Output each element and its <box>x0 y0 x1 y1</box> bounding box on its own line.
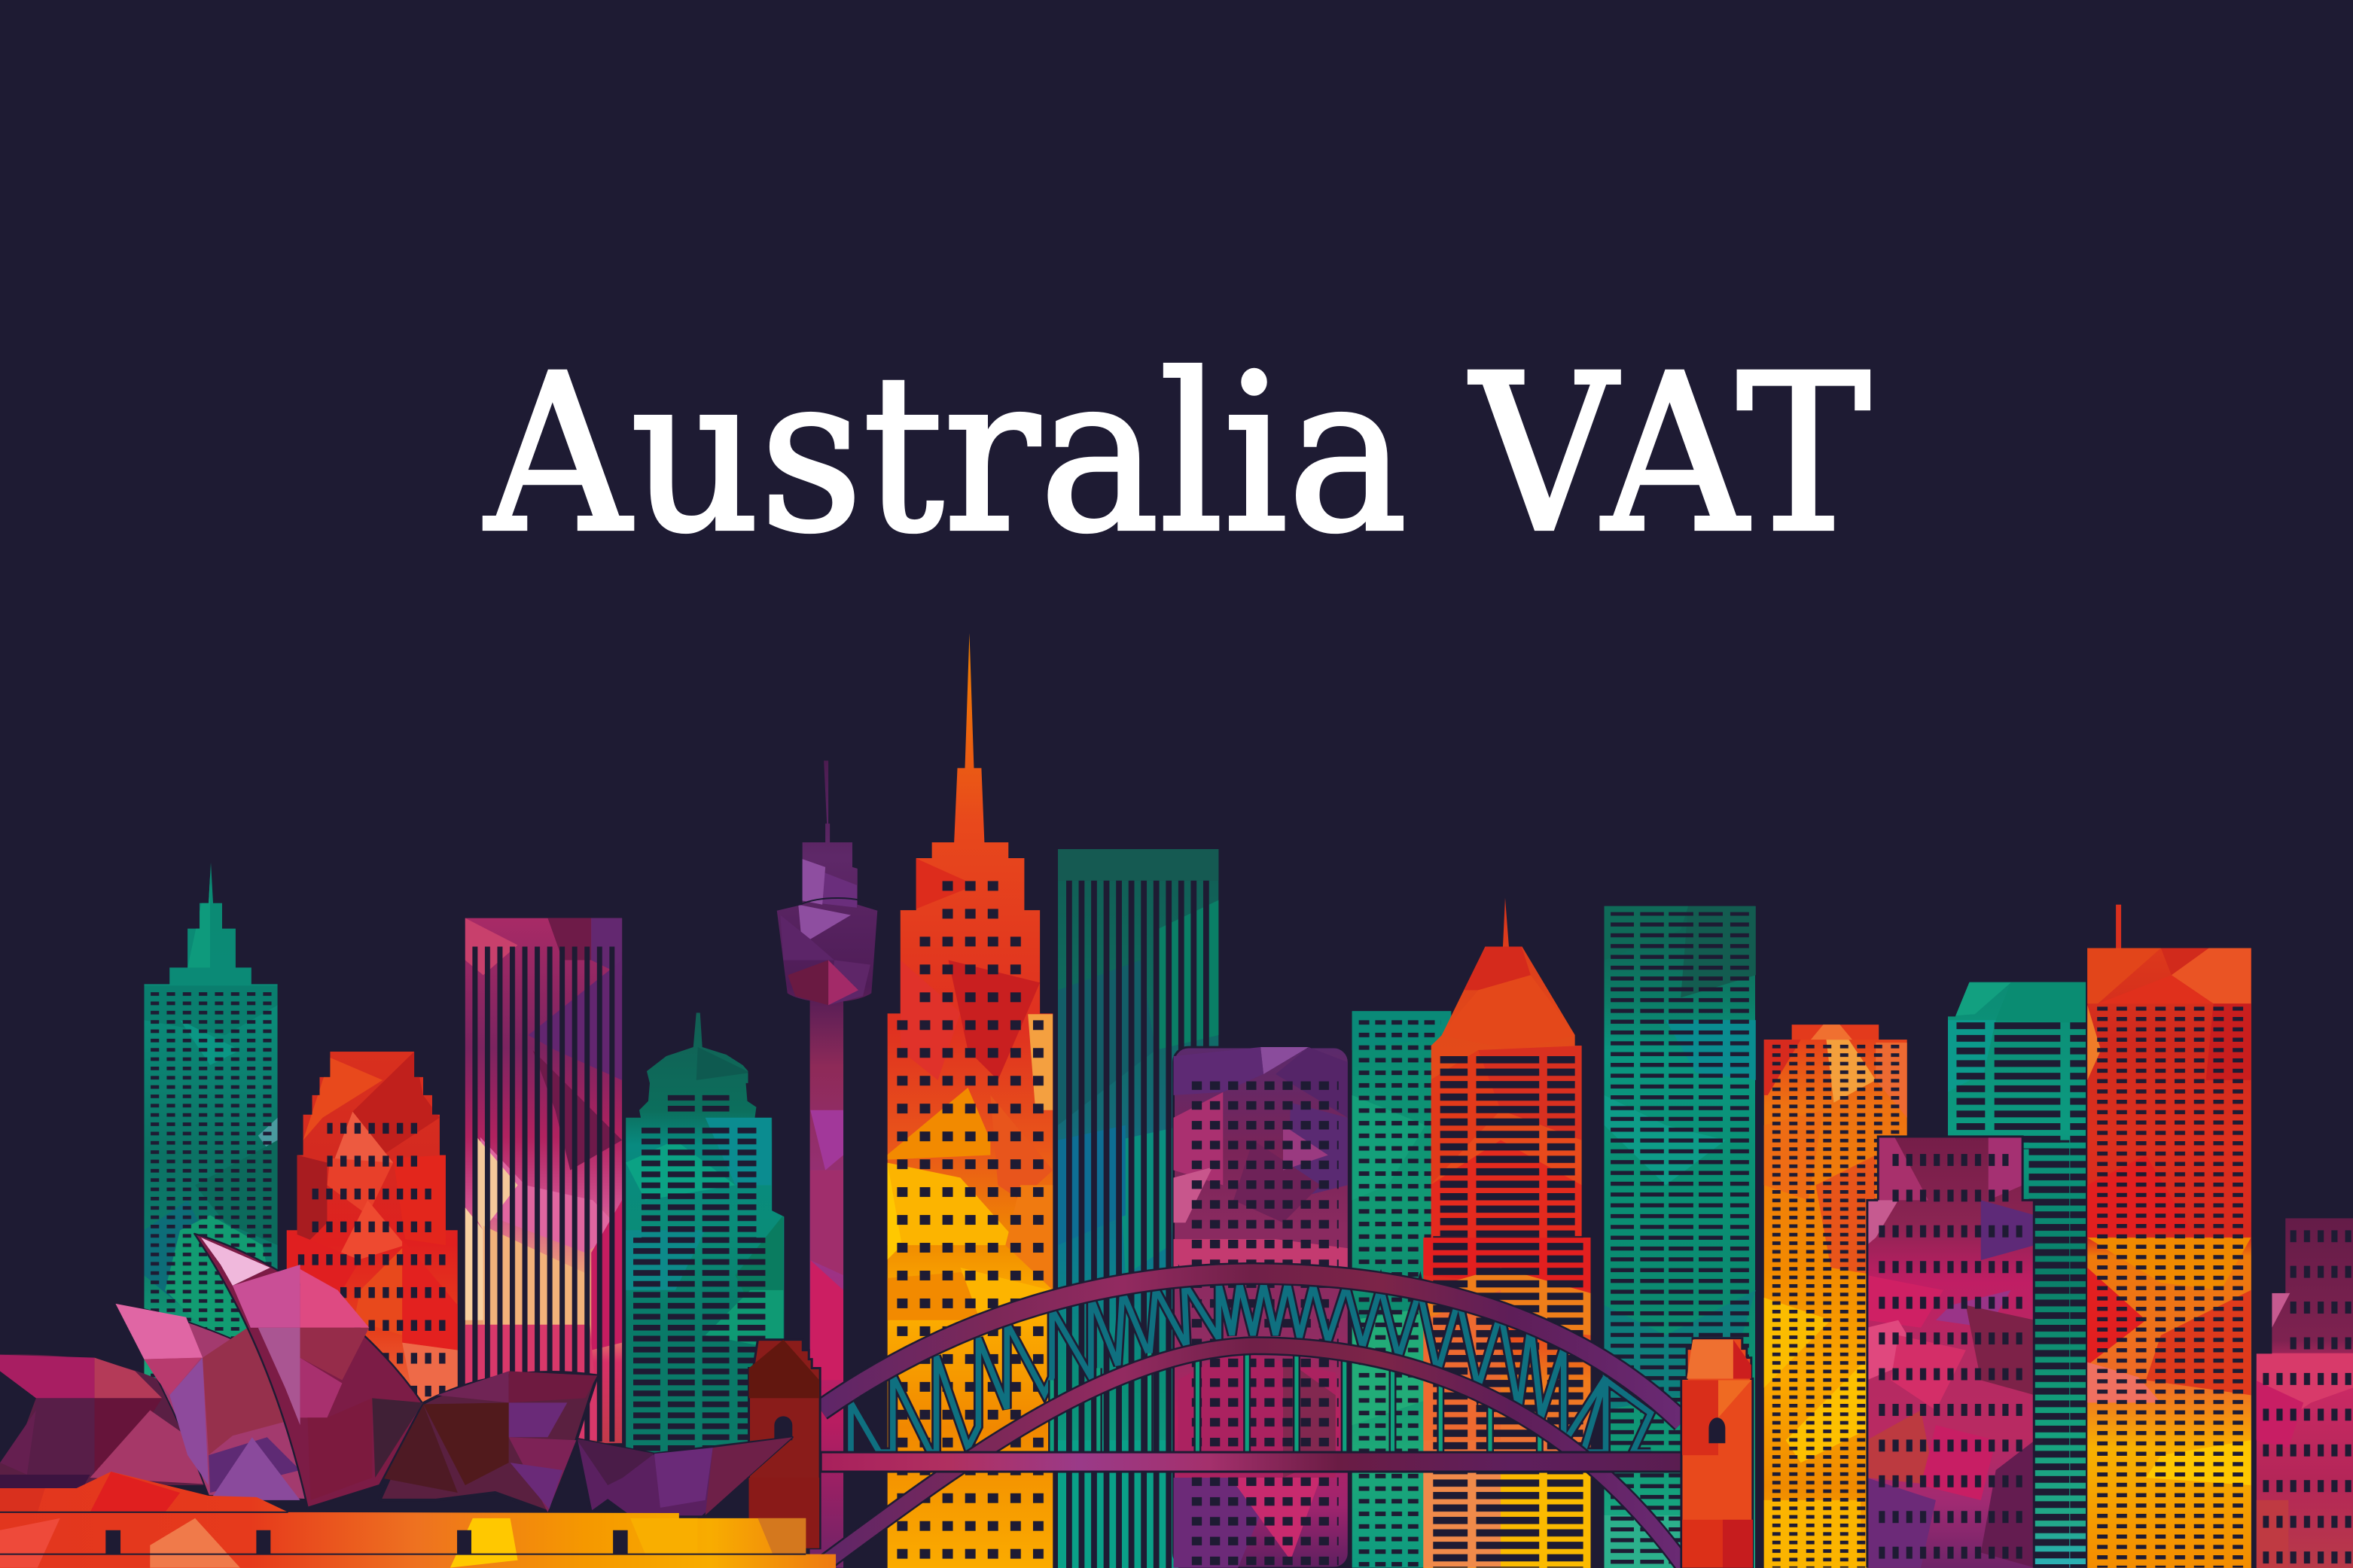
building: magenta striped tower <box>465 918 622 1443</box>
building: red pyramid-roof tower <box>1422 897 1591 1568</box>
windows <box>471 947 618 1442</box>
right sail small <box>576 1437 792 1517</box>
main sail <box>194 1234 423 1508</box>
windows <box>1065 881 1215 1568</box>
windows <box>1772 1044 1903 1568</box>
windows <box>1358 1020 1440 1568</box>
illustration: title and Sydney skyline <box>0 363 2353 1568</box>
windows <box>2263 1230 2353 1568</box>
building: tall teal tower <box>1605 906 1756 1568</box>
building: magenta stepped tower <box>1867 1136 2034 1568</box>
building: thin teal tower <box>1352 1011 1451 1568</box>
building: purple rounded tower <box>1174 1047 1349 1568</box>
building: teal striped tower <box>1058 849 1218 1568</box>
windows <box>896 881 1055 1568</box>
upper arch chord <box>821 1274 1682 1422</box>
windows <box>1433 1056 1583 1568</box>
windows <box>1956 1021 2086 1568</box>
building: far-right magenta tower <box>2255 1218 2353 1568</box>
bridge deck <box>821 1452 1682 1472</box>
Harbour Bridge <box>821 1274 1685 1568</box>
windows <box>1191 1080 1339 1568</box>
building: orange spire tower <box>887 633 1055 1568</box>
windows <box>2096 1006 2251 1568</box>
windows <box>297 1122 446 1404</box>
left bridge pylon <box>748 1340 820 1548</box>
lower arch chord <box>822 1346 1685 1568</box>
building: orange tower <box>1764 1025 1907 1568</box>
title: Australia VAT <box>483 329 1872 580</box>
right bridge pylon <box>1681 1338 1753 1568</box>
building: teal tower with spire <box>144 863 278 1395</box>
windows <box>633 1095 765 1455</box>
building: Sydney Tower <box>774 760 878 1568</box>
building: teal domed tower <box>626 1012 785 1463</box>
podium base <box>0 1472 836 1568</box>
building: teal chamfered tower <box>1948 981 2086 1568</box>
building: red stepped tower <box>287 1052 458 1411</box>
windows <box>1879 1154 2023 1568</box>
bridge truss <box>851 1283 1650 1452</box>
windows <box>150 991 275 1393</box>
right sail large <box>379 1372 597 1512</box>
bridge hangers <box>1052 1343 1540 1452</box>
far-left sail <box>0 1354 240 1488</box>
middle sail <box>115 1303 322 1500</box>
Sydney Opera House <box>0 1234 836 1568</box>
windows <box>1611 912 1749 1568</box>
building: orange-red corner tower <box>2087 905 2251 1568</box>
